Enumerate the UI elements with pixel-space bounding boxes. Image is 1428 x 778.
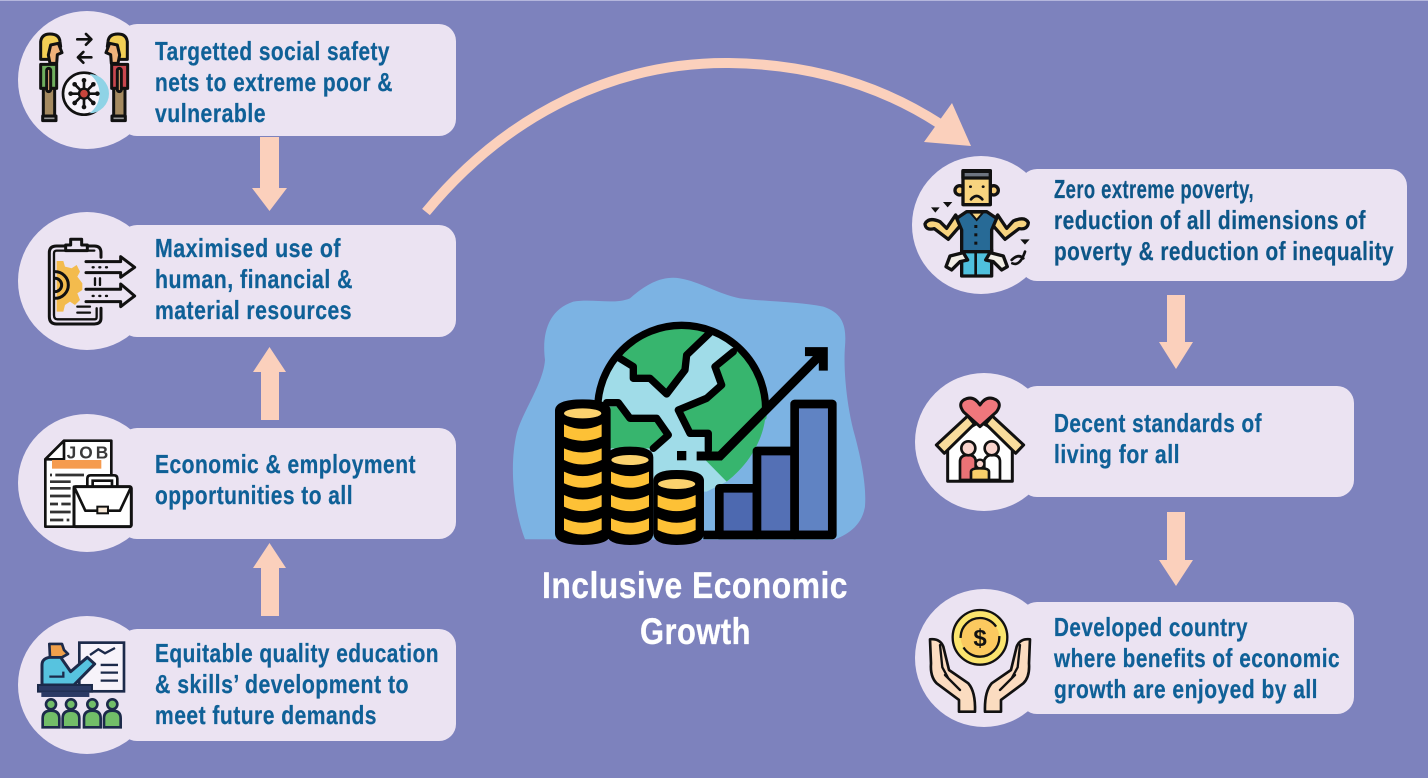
title: Inclusive Economic Growth bbox=[542, 565, 848, 652]
text: decent standards of living bbox=[1054, 408, 1262, 469]
panel: decent standards of living bbox=[915, 373, 1354, 511]
icon: house with family and heart bbox=[936, 398, 1024, 481]
text: education and skills: & skills’ development to bbox=[155, 669, 409, 699]
icon: hands holding dollar coin: $ bbox=[973, 625, 987, 652]
text: maximised resources: Maximised use of bbox=[155, 233, 341, 263]
text: developed country bbox=[1053, 612, 1340, 704]
text: zero extreme poverty bbox=[1054, 174, 1394, 266]
arrow: living standards to developed country bbox=[1159, 512, 1193, 586]
text: economic opportunities: Economic & employment bbox=[155, 449, 416, 479]
text: education and skills: Equitable quality education bbox=[155, 638, 439, 668]
text: developed country: growth are enjoyed by all bbox=[1054, 674, 1318, 704]
curved arrow: inputs to outcomes bbox=[426, 63, 971, 212]
blob background bbox=[513, 278, 865, 540]
panel: education and skills bbox=[18, 616, 456, 754]
bar chart bbox=[703, 404, 833, 535]
icon: teacher at board with students bbox=[38, 643, 124, 727]
arrow: poverty to living standards bbox=[1159, 295, 1193, 369]
text: maximised resources: material resources bbox=[155, 295, 352, 325]
panel: economic opportunities bbox=[18, 414, 456, 552]
arrow: opportunities to resources bbox=[253, 347, 286, 420]
text: social safety nets: nets to extreme poor & bbox=[155, 67, 393, 97]
icon: clipboard with gear and arrows bbox=[49, 239, 135, 324]
icon: poor man with empty pockets bbox=[925, 171, 1030, 276]
panel: zero extreme poverty bbox=[912, 156, 1407, 294]
text: economic opportunities bbox=[155, 449, 416, 510]
text: decent standards of living: living for all bbox=[1054, 439, 1180, 469]
text: zero extreme poverty: Zero extreme poverty, bbox=[1054, 174, 1254, 204]
panel: social safety nets bbox=[18, 11, 456, 149]
growth arrow bbox=[677, 352, 823, 460]
text: education and skills bbox=[155, 638, 439, 730]
icon: hands holding dollar coin bbox=[930, 610, 1030, 712]
arrow: education to opportunities bbox=[253, 543, 286, 616]
text: maximised resources: human, financial & bbox=[155, 264, 353, 294]
text: social safety nets: vulnerable bbox=[155, 98, 266, 128]
text: social safety nets bbox=[155, 36, 393, 128]
title: Inclusive Economic Growth: Inclusive Economic bbox=[542, 565, 848, 606]
panel: maximised resources bbox=[18, 212, 456, 350]
text: decent standards of living: Decent standards of bbox=[1054, 408, 1262, 438]
icon: job advert and briefcase bbox=[45, 441, 131, 527]
title: Inclusive Economic Growth: Growth bbox=[640, 611, 751, 652]
coin stacks bbox=[555, 399, 704, 545]
text: education and skills: meet future demands bbox=[155, 700, 377, 730]
globe bbox=[598, 313, 780, 492]
text: social safety nets: Targetted social safety bbox=[155, 36, 390, 66]
text: maximised resources bbox=[155, 233, 353, 325]
text: developed country: Developed country bbox=[1054, 612, 1248, 642]
icon: two people and virus bbox=[41, 34, 128, 121]
text: developed country: where benefits of economic bbox=[1053, 643, 1340, 673]
panel: developed country bbox=[915, 589, 1354, 727]
icon: job advert and briefcase: JOB bbox=[67, 443, 108, 463]
arrow: safety nets to resources bbox=[252, 137, 287, 211]
text: economic opportunities: opportunities to all bbox=[155, 480, 353, 510]
central icon: globe, coins and bar chart bbox=[513, 278, 865, 545]
